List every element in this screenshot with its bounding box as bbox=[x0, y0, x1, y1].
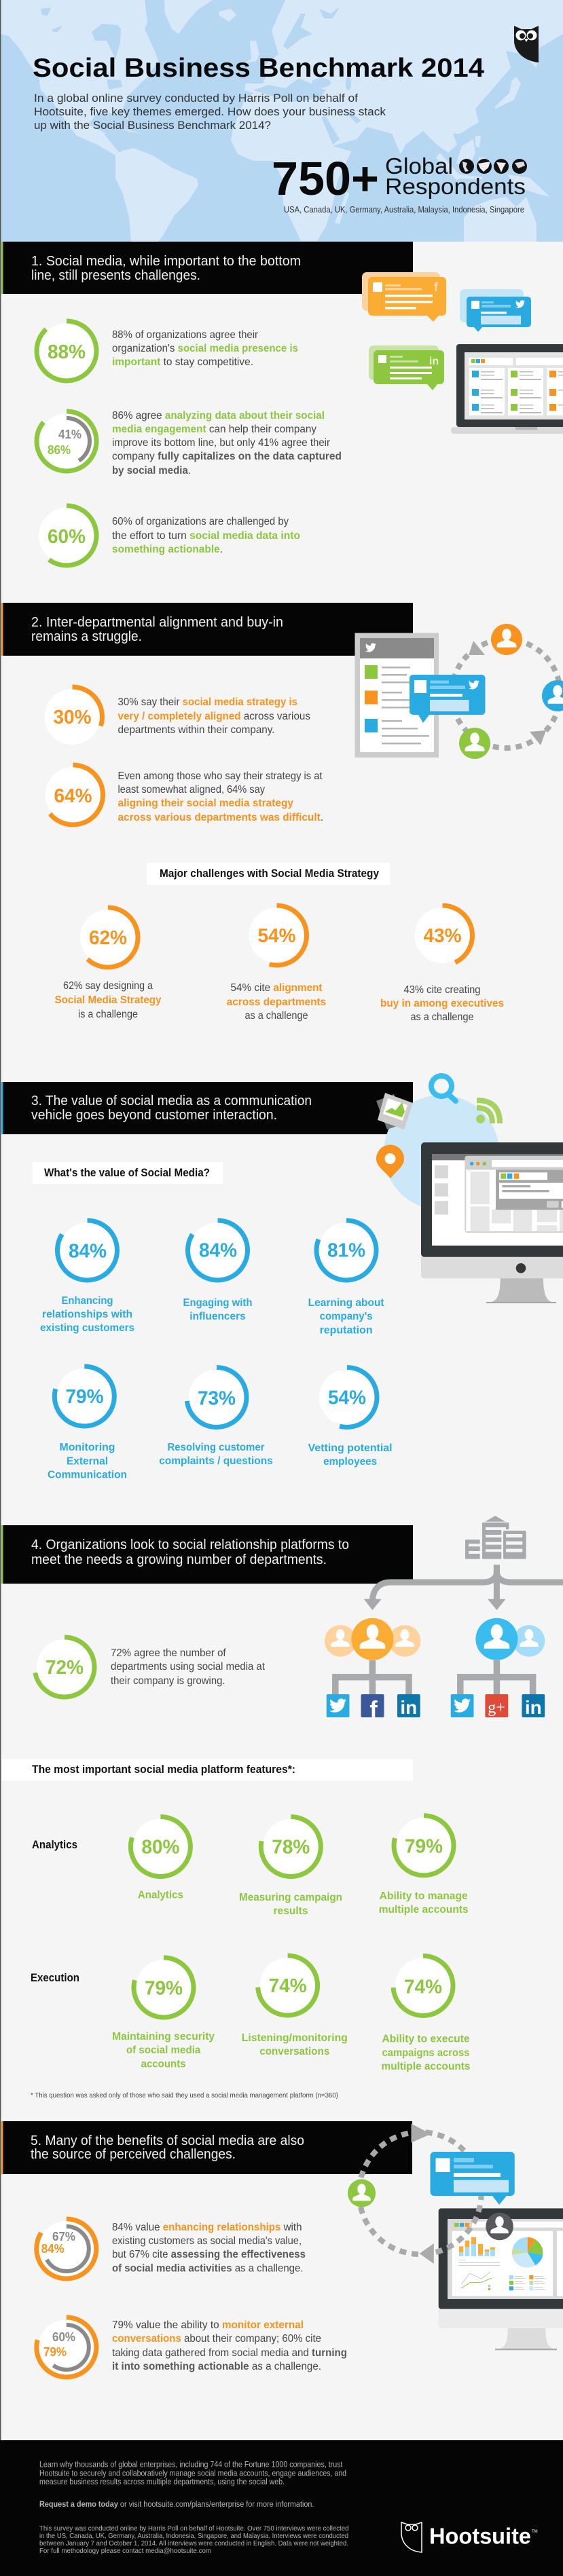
stat: 81% learning about reputation: reputation bbox=[320, 1325, 373, 1336]
text: 86% description: by social media. bbox=[112, 465, 191, 477]
text: 88% description: 88% of organizations agree their bbox=[112, 329, 259, 341]
subheading: value of social media: What's the value of Social Media? bbox=[44, 1166, 210, 1179]
icon: laptop dashboard bbox=[451, 344, 563, 434]
text: 72% description bbox=[111, 1647, 266, 1687]
text: 79% description: 79% value the ability to monitor external bbox=[112, 2319, 304, 2331]
icon: blue twitter bubble bbox=[460, 289, 531, 332]
title: Social Business Benchmark 2014 bbox=[33, 54, 484, 83]
icons: social networks group one bbox=[327, 1694, 420, 1723]
text: 79% description: conversations about their company; 60% cite bbox=[112, 2333, 321, 2345]
icon: blue message bubble bbox=[431, 2152, 515, 2205]
stat: 79% manage multiple accounts: 79% bbox=[405, 1835, 443, 1857]
stat: 84% engaging with influencers bbox=[183, 1220, 253, 1322]
750+ global respondents stat: 750+ bbox=[272, 152, 379, 205]
stat: 81% learning about reputation: Learning about bbox=[308, 1297, 384, 1309]
stat: 64% bbox=[43, 765, 103, 825]
stat: 79% monitoring bbox=[48, 1366, 127, 1481]
arrows: building to departments bbox=[364, 1565, 563, 1610]
section 3 heading bar: vehicle goes beyond customer interaction. bbox=[31, 1108, 277, 1123]
chart: pie bbox=[512, 2237, 543, 2268]
stat: 54% vetting employees bbox=[308, 1367, 393, 1468]
text: 84% description bbox=[112, 2222, 306, 2274]
stat: 72%: 72% bbox=[46, 1657, 84, 1679]
text: 88% description bbox=[112, 329, 298, 368]
icon: four globes bbox=[459, 159, 527, 174]
section 5 heading bar: 5. Many of the benefits of social media are also bbox=[31, 2133, 304, 2148]
icon: orange facebook bubble bbox=[362, 272, 446, 322]
stat: 81% learning about reputation bbox=[308, 1220, 384, 1336]
stat: 74% listening and monitoring bbox=[242, 1956, 348, 2057]
stat: 74% execute campaigns: 74% bbox=[404, 1977, 442, 1998]
icon: orange department people bbox=[325, 1618, 420, 1660]
footer: call to action: Request a demo today or visit hootsuite.com/plans/enterprise for more information. bbox=[39, 2501, 314, 2509]
stat: 81% learning about reputation: 81% bbox=[327, 1239, 365, 1261]
stat: 84% enhancing relationships: existing customers bbox=[40, 1322, 134, 1334]
subheading: major challenges: Major challenges with Social Media Strategy bbox=[160, 867, 379, 880]
stat: 78% measuring campaign results: Measuring campaign bbox=[239, 1892, 342, 1903]
icon: rss bbox=[477, 1100, 500, 1123]
icon: company building bbox=[465, 1516, 526, 1559]
stat: 43% challenge: 43% bbox=[424, 925, 462, 947]
section 1 heading bar: line, still presents challenges. bbox=[31, 268, 200, 283]
icon: Hootsuite owl bbox=[514, 26, 539, 62]
section 4 heading bar: 4. Organizations look to social relationship platforms to bbox=[31, 1537, 349, 1552]
stat: 81% learning about reputation: company's bbox=[320, 1311, 373, 1322]
section 3 heading bar bbox=[1, 1082, 413, 1134]
stat: 79% maintaining security bbox=[112, 1958, 215, 2070]
text: 60% description: something actionable. bbox=[112, 544, 223, 555]
stat: 60%: 60% bbox=[48, 526, 86, 548]
stat: 74% listening and monitoring: 74% bbox=[269, 1975, 307, 1997]
stat: 79% maintaining security: 79% bbox=[145, 1978, 183, 2000]
stat: 84% and 67%: 67% bbox=[52, 2230, 75, 2243]
stat: 62% challenge: 62% say designing a bbox=[63, 980, 153, 992]
stat: 84% and 67%: 84% bbox=[41, 2242, 65, 2256]
stat: 74% execute campaigns bbox=[382, 1956, 470, 2072]
stat: 84% enhancing relationships: 84% bbox=[69, 1241, 107, 1263]
text: 79% description bbox=[112, 2319, 347, 2372]
section 1 heading bar bbox=[1, 242, 413, 294]
stat: 79% and 60%: 60% bbox=[52, 2330, 75, 2344]
text: 88% description: organization's social media presence is bbox=[112, 343, 298, 354]
stat: 88%: 88% bbox=[48, 341, 86, 363]
icon: orange facebook bubble: f bbox=[434, 280, 439, 294]
text: 88% description: important to stay competitive. bbox=[112, 356, 253, 368]
icon: dashed cycle with arrows and people bbox=[348, 2124, 513, 2264]
text: 30% description: 30% say their social media strategy is bbox=[118, 696, 297, 708]
text: 84% description: of social media activities as a challenge. bbox=[112, 2263, 304, 2274]
stat: 54% challenge bbox=[227, 906, 326, 1022]
header panel with world map bbox=[0, 0, 563, 242]
section 2 heading bar: 2. Inter-departmental alignment and buy-in bbox=[31, 615, 283, 630]
text: 60% description bbox=[112, 516, 300, 555]
stat: 84% engaging with influencers: influencers bbox=[189, 1311, 246, 1322]
text: 84% description: existing customers as social media's value, bbox=[112, 2235, 302, 2247]
footer: about text: Learn why thousands of global enterprises, including 744 of the Fortune 1000 companies, trust bbox=[39, 2461, 343, 2469]
stat: 43% challenge: 43% cite creating bbox=[403, 984, 481, 996]
intro text: In a global online survey conducted by Harris Poll on behalf of bbox=[34, 92, 358, 105]
icon: green linkedin bubble: in bbox=[429, 356, 439, 367]
section 3 heading bar: 3. The value of social media as a communication bbox=[31, 1094, 312, 1108]
stat: 72% bbox=[35, 1637, 94, 1697]
stat: 84% and 67% bbox=[37, 2219, 96, 2279]
icon: twitter feed document bbox=[355, 633, 439, 758]
text: 79% description: it into something actionable as a challenge. bbox=[112, 2361, 321, 2372]
text: 86% description: 86% agree analyzing data about their social bbox=[112, 410, 325, 422]
subheading: major challenges bbox=[147, 863, 390, 885]
stat: 79% manage multiple accounts: Ability to manage bbox=[380, 1890, 468, 1902]
stat: 30%: 30% bbox=[53, 707, 92, 728]
footer: methodology: This survey was conducted online by Harris Poll on behalf of Hootsuite. Over 750 interviews were collected bbox=[39, 2524, 349, 2533]
stat: 62% challenge: is a challenge bbox=[78, 1009, 138, 1020]
intro text: Hootsuite, five key themes emerged. How does your business stack bbox=[34, 105, 386, 118]
icon: blue person bbox=[542, 680, 563, 711]
stat: 79% and 60%: 79% bbox=[43, 2345, 67, 2359]
stat: 54% vetting employees: Vetting potential bbox=[308, 1442, 393, 1454]
stat: 80% analytics bbox=[130, 1816, 190, 1901]
stat: 79% maintaining security: Maintaining security bbox=[112, 2031, 215, 2042]
icon: green person bbox=[459, 728, 490, 759]
stat: 74% execute campaigns: multiple accounts bbox=[382, 2061, 470, 2072]
stat: 78% measuring campaign results bbox=[239, 1816, 342, 1917]
750+ global respondents stat bbox=[272, 152, 527, 214]
row label: execution: Execution bbox=[31, 1971, 79, 1984]
stat: 54% vetting employees: employees bbox=[323, 1456, 377, 1468]
stat: 54% challenge: 54% cite alignment bbox=[231, 982, 322, 994]
stat: 43% challenge: as a challenge bbox=[410, 1011, 474, 1023]
chart: legend bbox=[488, 2275, 545, 2290]
footer: methodology bbox=[39, 2524, 349, 2555]
stat: 43% challenge bbox=[380, 906, 504, 1023]
stat: 54% vetting employees: 54% bbox=[328, 1387, 366, 1409]
stat: 79% and 60% bbox=[37, 2317, 96, 2377]
stat: 62% challenge: 62% bbox=[89, 927, 127, 949]
icon: analytics monitor bbox=[439, 2208, 563, 2350]
section 5 heading bar: the source of perceived challenges. bbox=[31, 2147, 236, 2162]
stat: 54% challenge: as a challenge bbox=[244, 1010, 308, 1022]
stat: 84% enhancing relationships bbox=[40, 1220, 134, 1334]
stat: 54% challenge: 54% bbox=[258, 925, 296, 947]
icon: location pin bbox=[376, 1144, 404, 1178]
text: 84% description: 84% value enhancing relationships with bbox=[112, 2222, 302, 2233]
footer: methodology: For full methodology please contact media@hootsuite.com bbox=[39, 2547, 211, 2555]
icon: blue twitter bubble bbox=[410, 675, 485, 723]
stat: 74% listening and monitoring: Listening/monitoring bbox=[242, 2032, 348, 2044]
icon: orange person bbox=[491, 624, 522, 655]
footer: methodology: in the US, Canada, UK, Germany, Australia, Indonesia, Singapore, and Malaysia. Interviews were conducted bbox=[39, 2532, 348, 2540]
icon: photo bbox=[376, 1093, 413, 1130]
stat: 73% resolving complaints: complaints / questions bbox=[159, 1455, 273, 1467]
logo: Hootsuite: TM bbox=[532, 2530, 538, 2534]
text: 30% description: departments within their company. bbox=[118, 724, 274, 736]
stat: 79% monitoring: External bbox=[67, 1455, 108, 1468]
stat: 80% analytics: Analytics bbox=[138, 1890, 183, 1901]
footer: about text bbox=[39, 2461, 346, 2486]
icons: social networks group one: f bbox=[369, 1697, 378, 1723]
text: 72% description: departments using social media at bbox=[111, 1661, 266, 1673]
icon: green person bbox=[348, 2179, 376, 2207]
stat: 62% challenge: Social Media Strategy bbox=[54, 994, 162, 1006]
section 4 heading bar bbox=[1, 1525, 413, 1584]
subheading: value of social media bbox=[33, 1162, 223, 1184]
chart: lines bbox=[461, 2272, 492, 2288]
text: 60% description: 60% of organizations are challenged by bbox=[112, 516, 289, 527]
text: 64% description: Even among those who say their strategy is at bbox=[118, 770, 323, 782]
text: 60% description: the effort to turn social media data into bbox=[112, 530, 300, 542]
text: 30% description bbox=[118, 696, 310, 736]
text: 79% description: taking data gathered from social media and turning bbox=[112, 2347, 347, 2359]
stat: 62% challenge bbox=[54, 908, 162, 1020]
stat: 79% monitoring: Communication bbox=[48, 1469, 127, 1481]
stat: 74% execute campaigns: campaigns across bbox=[382, 2047, 470, 2059]
stat: 73% resolving complaints: 73% bbox=[198, 1387, 236, 1409]
icons: social networks group two: in bbox=[525, 1697, 542, 1718]
stat: 84% engaging with influencers: Engaging with bbox=[183, 1297, 253, 1309]
text: 64% description: across various departments was difficult. bbox=[118, 812, 323, 823]
section 2 heading bar: remains a struggle. bbox=[31, 629, 142, 644]
footer: methodology: between January 7 and October 1, 2014. All interviews were conducted in English. Data were not weighted. bbox=[39, 2539, 348, 2547]
stat: 84% enhancing relationships: Enhancing bbox=[61, 1295, 113, 1307]
icon: blue department people bbox=[475, 1618, 545, 1660]
text: 64% description: least somewhat aligned, 64% say bbox=[118, 784, 265, 796]
text: 86% description bbox=[112, 410, 342, 477]
stat: 74% execute campaigns: Ability to execute bbox=[382, 2034, 470, 2045]
stat: 80% analytics: 80% bbox=[141, 1837, 180, 1859]
text: 86% description: media engagement can help their company bbox=[112, 424, 316, 435]
text: 86% description: company fully capitalizes on the data captured bbox=[112, 451, 342, 462]
text: 72% description: their company is growing. bbox=[111, 1675, 225, 1687]
icon: search bbox=[431, 1076, 456, 1101]
chart: stacked bars bbox=[458, 2237, 500, 2266]
connectors: department trees bbox=[335, 1660, 533, 1694]
logo: Hootsuite bbox=[401, 2522, 538, 2552]
subheading: platform features: The most important social media platform features*: bbox=[32, 1763, 295, 1776]
text: 64% description: aligning their social media strategy bbox=[118, 798, 293, 809]
stat: 79% maintaining security: of social media bbox=[126, 2045, 201, 2056]
text: 64% description bbox=[118, 770, 323, 823]
750+ global respondents stat: Respondents bbox=[385, 174, 526, 199]
subheading: platform features bbox=[2, 1759, 413, 1780]
icons: social networks group two bbox=[451, 1694, 545, 1718]
750+ global respondents stat: USA, Canada, UK, Germany, Australia, Malaysia, Indonesia, Singapore bbox=[284, 205, 524, 214]
text: 84% description: but 67% cite assessing the effectiveness bbox=[112, 2249, 306, 2260]
logo: Hootsuite: Hootsuite bbox=[429, 2524, 531, 2548]
stat: 54% challenge: across departments bbox=[227, 996, 326, 1008]
text: 72% description: 72% agree the number of bbox=[111, 1647, 226, 1659]
stat: 79% maintaining security: accounts bbox=[141, 2059, 186, 2070]
footer: about text: measure business results across multiple departments, using the social web. bbox=[39, 2478, 285, 2486]
stat: 78% measuring campaign results: results bbox=[273, 1905, 308, 1917]
stat: 86% and 41%: 86% bbox=[48, 443, 71, 457]
stat: 78% measuring campaign results: 78% bbox=[272, 1837, 310, 1859]
stat: 79% monitoring: Monitoring bbox=[60, 1442, 115, 1453]
footnote: * This question was asked only of those who said they used a social media management platform (n=360) bbox=[31, 2091, 338, 2099]
intro text bbox=[34, 92, 386, 132]
stat: 64%: 64% bbox=[54, 785, 92, 807]
intro text: up with the Social Business Benchmark 2014? bbox=[34, 119, 271, 132]
stat: 84% engaging with influencers: 84% bbox=[199, 1239, 237, 1261]
icon: green linkedin bubble bbox=[369, 346, 444, 390]
stat: 73% resolving complaints bbox=[159, 1367, 273, 1467]
stat: 86% and 41% bbox=[37, 411, 96, 471]
footer panel bbox=[0, 2440, 563, 2576]
footer: about text: Hootsuite to securely and collaboratively manage social media accounts, engage audiences, and bbox=[39, 2469, 346, 2478]
stat: 86% and 41%: 41% bbox=[58, 428, 81, 441]
stat: 30% bbox=[42, 687, 102, 747]
section 2 heading bar bbox=[1, 603, 413, 656]
icon: desktop monitor bbox=[421, 1142, 563, 1303]
stat: 73% resolving complaints: Resolving customer bbox=[167, 1442, 265, 1453]
stat: 74% listening and monitoring: conversations bbox=[259, 2046, 329, 2057]
750+ global respondents stat: Global bbox=[385, 153, 453, 179]
row label: analytics: Analytics bbox=[32, 1838, 77, 1851]
stat: 88% bbox=[37, 321, 96, 381]
section 1 heading bar: 1. Social media, while important to the bottom bbox=[31, 254, 301, 269]
icon: monitoring illustration bbox=[376, 1076, 563, 1303]
stat: 79% monitoring: 79% bbox=[65, 1386, 104, 1408]
world map bbox=[0, 0, 563, 242]
icon: dark person bbox=[486, 2213, 513, 2240]
stat: 79% manage multiple accounts bbox=[379, 1816, 469, 1916]
section 5 heading bar bbox=[1, 2121, 412, 2174]
stat: 60% bbox=[37, 506, 96, 565]
icon: alignment cycle of people bbox=[452, 624, 563, 759]
stat: 43% challenge: buy in among executives bbox=[380, 998, 504, 1009]
icons: social networks group two: g+ bbox=[488, 1699, 505, 1717]
stat: 79% manage multiple accounts: multiple accounts bbox=[379, 1904, 469, 1916]
stat: 84% enhancing relationships: relationships with bbox=[42, 1309, 132, 1320]
left page edge bbox=[0, 0, 1, 2440]
text: 86% description: improve its bottom line, but only 41% agree their bbox=[112, 437, 331, 449]
icons: social networks group one: in bbox=[400, 1697, 417, 1718]
section 4 heading bar: meet the needs a growing number of departments. bbox=[31, 1552, 327, 1567]
text: 30% description: very / completely aligned across various bbox=[118, 711, 310, 722]
